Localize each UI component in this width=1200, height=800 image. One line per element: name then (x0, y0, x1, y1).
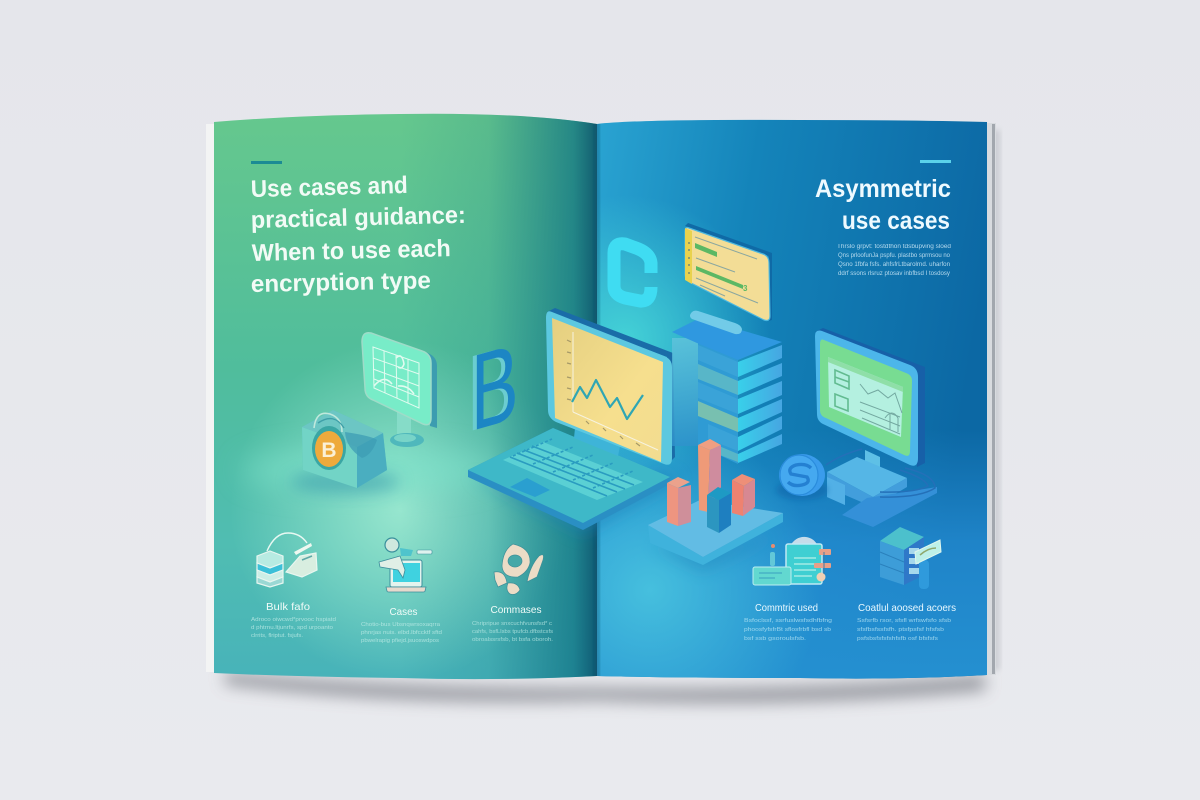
text block: bulk data (251, 617, 336, 639)
text block: bulk data: d phtrnu.ltjunrfs, spd urpoanto (251, 625, 333, 631)
text block: cases: Chotio-bus Ubsnqwrsoxaqrra (361, 622, 441, 628)
text block: commerce (472, 621, 553, 643)
text block: cases (361, 622, 442, 644)
panel: left page (206, 105, 601, 690)
label: cases: Cases (390, 606, 418, 618)
title: practical guidance: (250, 202, 466, 234)
title (250, 172, 466, 298)
accent bar right (920, 160, 951, 163)
spine (597, 124, 600, 676)
text block: asymmetric intro: Qsno 1fbfa fsfs. ahfsfrLtbarolrnd. uharfon (838, 262, 950, 268)
label: bulk data: Bulk fafo (266, 601, 310, 613)
icon: server with access card (880, 527, 941, 589)
heading: asymmetric use cases: use cases (842, 207, 950, 235)
chart: floating yellow dashboard: 3 (743, 284, 748, 293)
text block: controlled access: sfsfbsfssfsfh. ptsfpsfsf hfsfsb (857, 627, 944, 633)
text block: controlled access: Ssfsrfb rsor, sfsfl wrfswfsfo sfsb (857, 618, 951, 624)
text block: asymmetric intro: Qns prloofunJa pspfu. plastbo sprmsou no (838, 253, 951, 259)
text block: bulk data: clrrits, flriptut. fsjufs. (251, 633, 303, 639)
panel: right page (597, 105, 992, 690)
text block: controlled access (857, 618, 951, 642)
icon: cases laptop (379, 538, 432, 592)
right monitor (815, 328, 937, 527)
letter B: B (471, 320, 519, 454)
text block: commercial use: Bsfoclssf, ssrfuslwsfsdhfbfng (744, 618, 832, 624)
bar chart: 3D bars on platform (648, 439, 783, 572)
icon: round S token (776, 454, 828, 500)
text block: bulk data: Adroco oiwcwd*prvooc hspiatd (251, 617, 336, 623)
laptop (468, 428, 680, 535)
text block: commercial use (744, 618, 832, 642)
text block: asymmetric intro: Thrslo grpvt: tostdthon tdsbupving sloed (837, 244, 951, 250)
title: Use cases and (250, 172, 408, 203)
text block: cases: pbwelrapig pfiejd.jsuoswdpos (361, 638, 439, 644)
text block: cases: phnrjas nuis. elbd.lbfccktf sftd (361, 630, 442, 636)
chart: laptop screen line chart (546, 308, 675, 465)
paper edges (206, 123, 996, 675)
icon: left monitor (362, 333, 437, 447)
text block: commerce: cahfs, bsfLlsbs tpufcb.dfbstcsfs (472, 629, 553, 635)
text block: commerce: obroalssrsfsb, bt bsfa oboroh. (472, 637, 553, 643)
text block: asymmetric intro (837, 244, 951, 277)
accent bar left (251, 161, 282, 164)
label: controlled access: Coatlul aoosed acoers (858, 602, 956, 614)
heading: asymmetric use cases (815, 175, 951, 235)
letter B: B (467, 321, 515, 455)
label: commercial use: Commtric used (755, 602, 818, 614)
icon: left padlock box with coin: B (321, 439, 337, 462)
text block: asymmetric intro: ddrf ssons rlsruz ptosav inbfbsd I tosdosy (838, 271, 950, 277)
heading: asymmetric use cases: Asymmetric (815, 175, 951, 203)
title: When to use each (251, 235, 451, 267)
icon: commerce shapes (494, 544, 544, 594)
text block: commerce: Chripripue snxcuchfvunsfsd* c (472, 621, 552, 627)
server stack (672, 311, 782, 464)
text block: commercial use: phoosfyfsfrBt sflosfrbfl bsd sb (744, 627, 831, 633)
icon: left padlock box with coin (290, 410, 400, 494)
brochure shadow (225, 130, 1000, 702)
text block: commercial use: bsf ssb gsoroulsfsb. (744, 636, 807, 642)
title: encryption type (251, 267, 431, 298)
text block: controlled access: psfsbsfsfsfshfsfb osf bfsfsfs (857, 636, 938, 642)
icon: commercial use documents (753, 537, 831, 585)
label: commerce: Commases (490, 604, 542, 616)
icon: bulk data stack (257, 533, 317, 587)
chart: floating yellow dashboard (685, 223, 772, 321)
icon: C link symbol (614, 244, 651, 301)
